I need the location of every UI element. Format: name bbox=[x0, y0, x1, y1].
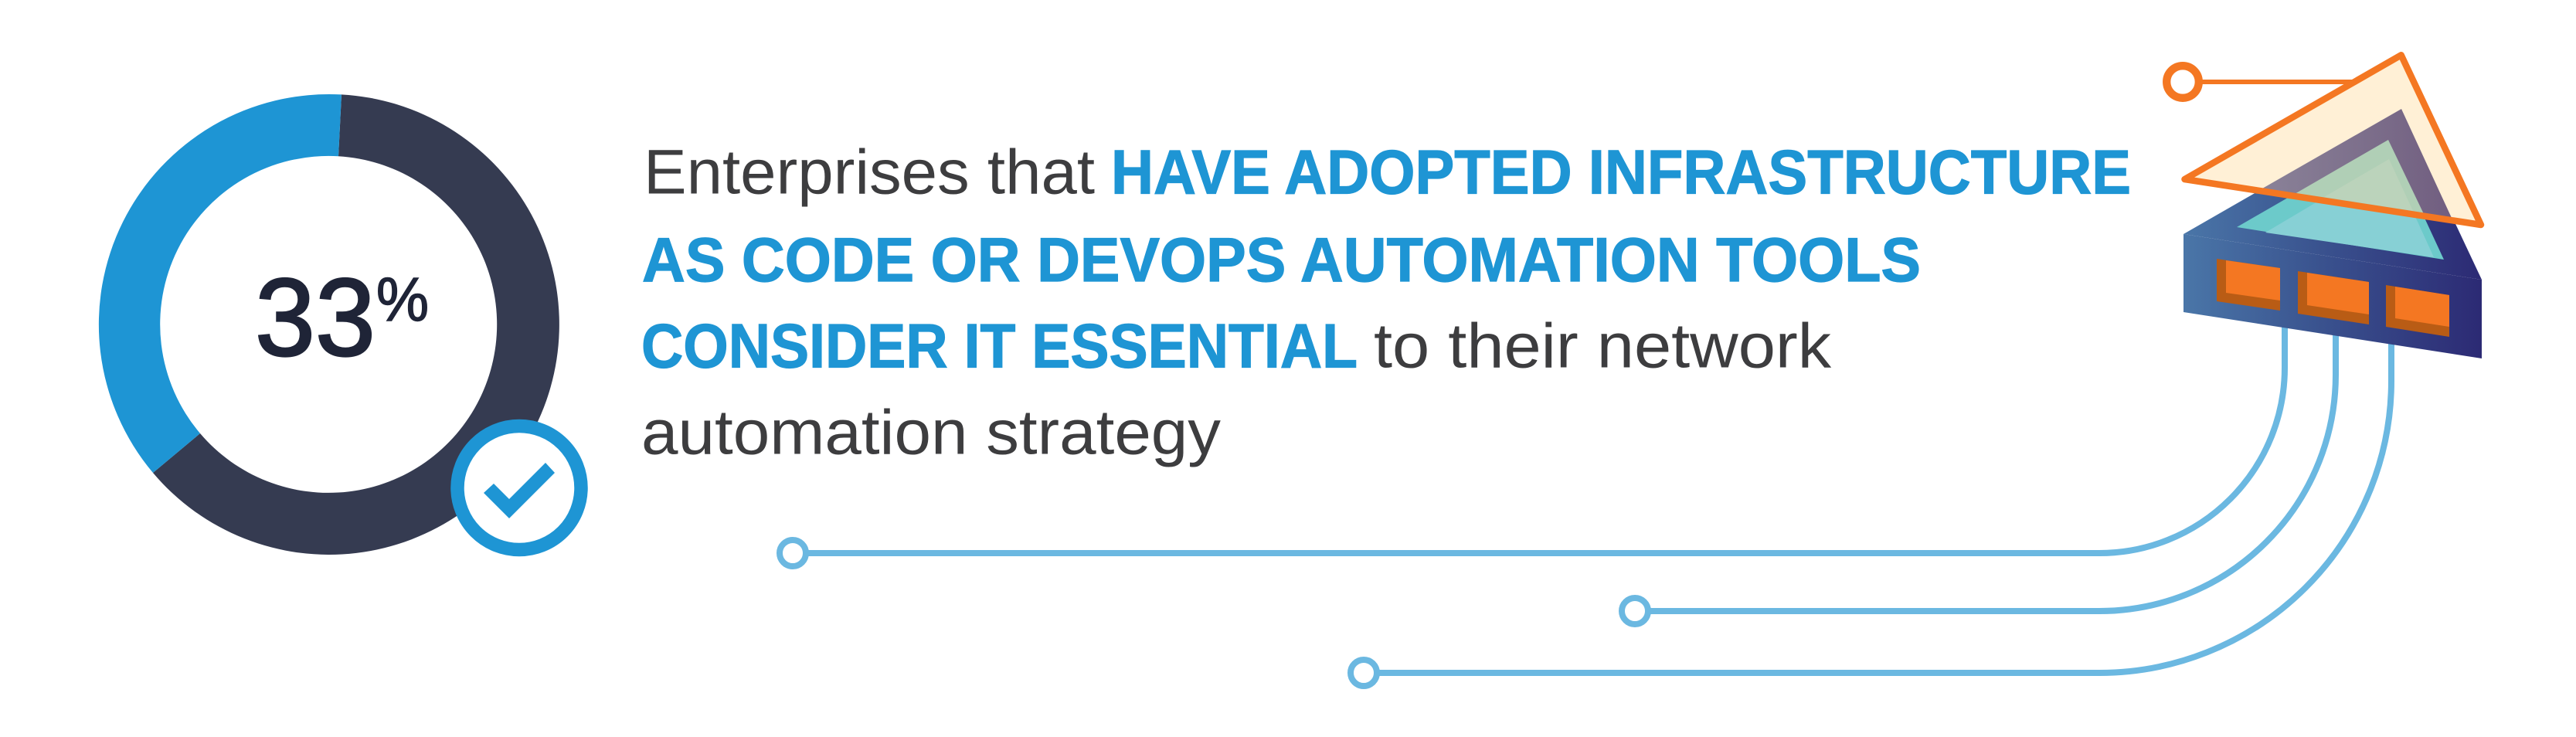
line 2: AS CODE OR DEVOPS AUTOMATION TOOLS bbox=[642, 226, 1921, 295]
donut ring: dark remainder bbox=[153, 94, 559, 555]
line 1: Enterprises that bbox=[644, 138, 1095, 208]
layer tint highlight bbox=[2324, 159, 2413, 211]
line 3 bbox=[641, 311, 1832, 382]
orange node connector bbox=[2166, 66, 2355, 98]
statement text bbox=[641, 138, 2131, 468]
port 3 bbox=[2386, 285, 2449, 337]
translucent layer fill bbox=[2185, 55, 2481, 225]
line 4: automation strategy bbox=[641, 398, 1221, 468]
donut ring: blue segment bbox=[99, 94, 342, 473]
line 3: CONSIDER IT ESSENTIAL bbox=[641, 312, 1358, 382]
orange layer outline bbox=[2185, 55, 2481, 225]
port 2 bbox=[2298, 271, 2369, 324]
line 1 bbox=[644, 138, 2131, 208]
line 1: HAVE ADOPTED INFRASTRUCTURE bbox=[1111, 138, 2131, 208]
layer tint over screen bbox=[2295, 140, 2424, 214]
layer tint over device bbox=[2262, 109, 2452, 218]
line 3: to their network bbox=[1374, 311, 1832, 382]
network device illustration bbox=[2183, 55, 2482, 358]
port 1 bbox=[2217, 259, 2280, 311]
big number: 33 bbox=[255, 256, 376, 379]
percent sign: % bbox=[376, 265, 429, 334]
connector 2 bbox=[1622, 324, 2336, 624]
icon: check badge bbox=[457, 426, 581, 550]
circuit connector lines bbox=[780, 324, 2391, 686]
teal screen bbox=[2237, 140, 2444, 260]
device front face bbox=[2183, 234, 2482, 358]
connector 3 bbox=[1351, 324, 2391, 686]
connector 1 bbox=[780, 324, 2285, 566]
device top face bbox=[2183, 109, 2482, 280]
donut chart: 33% bbox=[99, 94, 581, 555]
teal screen highlight bbox=[2265, 159, 2434, 257]
